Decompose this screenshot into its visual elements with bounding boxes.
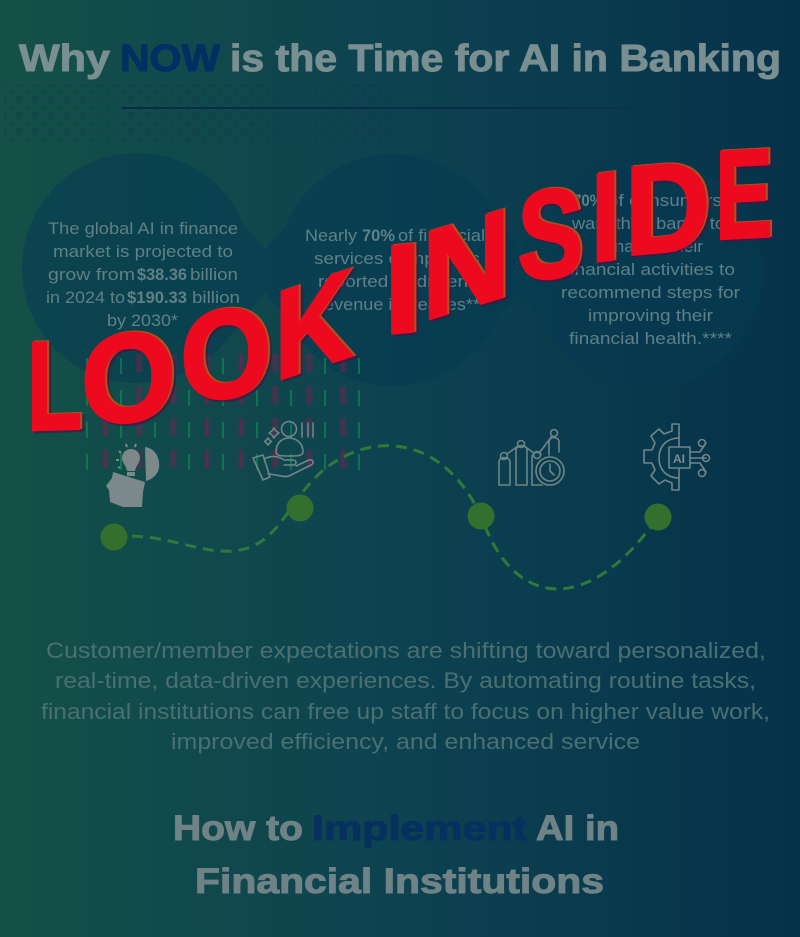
text: market growth: grow from: [48, 265, 135, 284]
text: revenue: reported AI-driven: [318, 272, 468, 291]
ghost texture behind title: [4, 84, 394, 144]
stamp: look inside: O: [180, 280, 272, 428]
text: revenue: of financial: [398, 226, 485, 245]
title: is the Time for AI in Banking: [230, 38, 781, 80]
stamp: look inside: I: [384, 218, 422, 362]
stamp: look inside: E: [715, 122, 772, 266]
stamp: look inside: [27, 122, 772, 458]
icon: head with lightbulb: [106, 444, 159, 507]
text: market growth: [46, 219, 240, 330]
title: NOW: [120, 38, 220, 80]
stamp: look inside: S: [518, 161, 583, 307]
icon: hand with person: [253, 422, 313, 480]
stamp: look inside: D: [625, 134, 710, 282]
stamp: look inside: I: [591, 145, 620, 289]
paragraph: [41, 638, 770, 754]
title: [19, 38, 781, 80]
heading: how to implement: AI in: [536, 809, 619, 848]
text: market growth: by 2030*: [107, 311, 178, 330]
text: consumers: financial activities to: [565, 260, 735, 279]
text: market growth: $38.36: [137, 265, 187, 284]
text: revenue: services companies: [314, 249, 480, 268]
text: consumers: financial health.****: [569, 329, 732, 348]
text: market growth: market is projected to: [53, 242, 233, 261]
text: market growth: The global AI in finance: [48, 219, 238, 238]
text: consumers: [561, 191, 740, 348]
dashed path: [114, 446, 658, 589]
text: consumers: 70%: [573, 191, 603, 210]
text: market growth: billion: [192, 288, 240, 307]
paragraph: Customer/member expectations are shifting toward personalized,: [46, 638, 766, 663]
text: market growth: billion: [190, 265, 238, 284]
stamp: look inside: K: [275, 242, 353, 408]
icon: AI gear: AI: [673, 452, 685, 466]
heading: how to implement: How to: [173, 809, 303, 848]
paragraph: financial institutions can free up staff to focus on higher value work,: [41, 699, 770, 724]
text: consumers: improving their: [588, 306, 713, 325]
title underline: [122, 107, 682, 109]
heading: how to implement: [173, 809, 619, 901]
stamp: look inside: O: [81, 305, 176, 452]
paragraph: improved efficiency, and enhanced service: [171, 729, 640, 754]
text: market growth: in 2024 to: [46, 288, 125, 307]
icon: chart with clock: [499, 430, 564, 485]
heading: how to implement: Implement: [312, 809, 527, 848]
title: Why: [19, 38, 110, 80]
heading: how to implement: Financial Institutions: [195, 862, 604, 901]
text: consumers: want their banks to: [571, 214, 725, 233]
text: consumers: recommend steps for: [561, 283, 740, 302]
text: revenue: [305, 226, 485, 314]
paragraph: real-time, data-driven experiences. By automating routine tasks,: [55, 668, 756, 693]
timeline dots: [100, 494, 672, 550]
glitch texture: [78, 345, 370, 470]
text: consumers: of consumers: [608, 191, 722, 210]
icon: AI gear: [644, 424, 710, 490]
text: revenue: revenue increases**: [318, 295, 480, 314]
stamp: look inside: N: [422, 180, 510, 348]
text: consumers: analyze their: [605, 237, 703, 256]
text: market growth: $190.33: [127, 288, 187, 307]
text: revenue: 70%: [362, 226, 395, 245]
text: revenue: Nearly: [305, 226, 358, 245]
stamp: look inside: L: [27, 316, 82, 458]
panel: stat circles: [22, 153, 763, 388]
